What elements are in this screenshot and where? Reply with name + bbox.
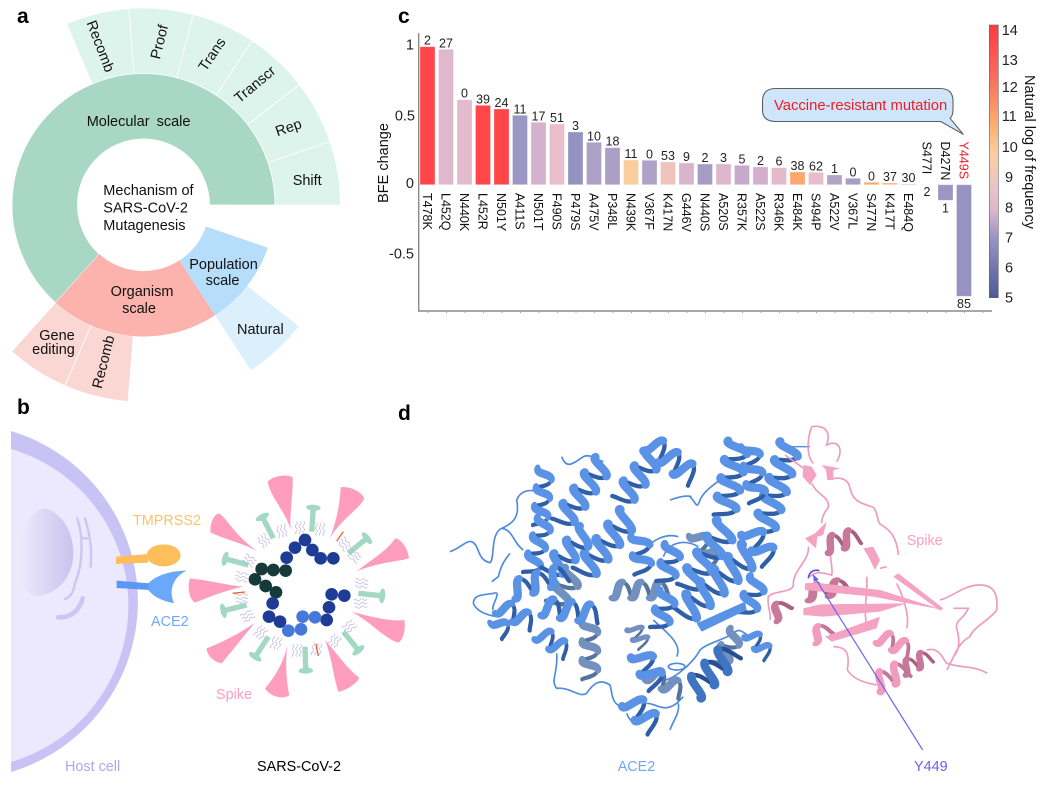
ACE2 rear grey helices xyxy=(546,529,744,699)
bar count labels: 9 xyxy=(683,150,690,164)
colour bar tick labels: 7 xyxy=(1005,230,1013,246)
bar count labels: 2 xyxy=(424,34,431,48)
mutation labels: N501Y xyxy=(494,193,508,232)
schematic labels: Host cell xyxy=(65,759,120,775)
panel d: protein structure xyxy=(398,402,997,775)
bar count labels: 53 xyxy=(661,149,675,163)
Y449 residue marker and arrow xyxy=(808,570,923,750)
bar count labels: 30 xyxy=(902,171,915,185)
sunburst labels: editing xyxy=(32,342,75,358)
colour bar tick labels: 14 xyxy=(1002,23,1018,39)
bar count labels: 62 xyxy=(809,159,823,173)
TMPRSS2 receptor xyxy=(116,544,181,566)
y axis tick labels: -0.5 xyxy=(389,246,414,262)
mutation labels: G446V xyxy=(679,193,693,233)
bars xyxy=(420,47,972,296)
panel label c: c xyxy=(398,5,410,28)
bar count labels: 5 xyxy=(739,152,746,166)
mutation labels: N440S xyxy=(698,193,712,231)
mutation labels: L452R xyxy=(476,193,490,230)
schematic labels: SARS-CoV-2 xyxy=(257,759,341,775)
colour bar tick labels: 12 xyxy=(1002,80,1018,96)
mutation labels: E484Q xyxy=(901,193,915,232)
bar count labels: 2 xyxy=(702,151,709,165)
structure labels xyxy=(618,533,948,775)
bar count labels: 3 xyxy=(572,119,579,133)
colour bar tick labels: 9 xyxy=(1005,170,1013,186)
mutation labels: L452Q xyxy=(439,193,453,231)
bar count labels: 0 xyxy=(461,87,468,101)
bar count labels: 6 xyxy=(776,155,783,169)
axes xyxy=(419,33,992,311)
outer ring: organism mechanisms xyxy=(12,303,133,401)
sunburst labels: Organism xyxy=(111,284,173,300)
spike loops xyxy=(768,426,997,685)
colour bar tick labels: 10 xyxy=(1002,140,1018,156)
mutation labels: N501T xyxy=(531,193,545,231)
receptor icons and spike schematic xyxy=(116,476,409,697)
ACE2 receptor xyxy=(117,571,187,603)
sunburst labels: Molecular scale xyxy=(87,114,190,130)
mutation labels: A411S xyxy=(513,193,527,230)
mutation labels: S494P xyxy=(809,193,823,231)
spike beta strands xyxy=(803,465,943,642)
ACE2 loops xyxy=(450,447,810,730)
sunburst labels: scale xyxy=(122,301,156,317)
panel b: host cell and virus schematic xyxy=(11,396,409,775)
sunburst labels: Mechanism of xyxy=(103,183,195,199)
RNA beads xyxy=(249,534,351,637)
mutation labels: T478K xyxy=(420,193,434,230)
bar count labels: 18 xyxy=(606,135,619,149)
bar count labels: 0 xyxy=(646,147,653,161)
segment: organism scale xyxy=(56,254,215,336)
bar count labels: 51 xyxy=(550,111,564,125)
callout: vaccine-resistant mutation: Vaccine-resistant mutation xyxy=(774,98,947,114)
structure labels: ACE2 xyxy=(618,759,655,775)
sunburst labels: Recomb xyxy=(90,334,118,390)
sunburst labels: Recomb xyxy=(83,18,117,75)
y axis tick labels: 0.5 xyxy=(395,109,415,125)
ACE2 dark coil xyxy=(685,643,741,698)
panel label b: b xyxy=(17,396,30,419)
y axis title: BFE change xyxy=(376,123,392,203)
sunburst labels: Transcr xyxy=(232,63,279,107)
mutation labels: V367F xyxy=(642,193,656,230)
sunburst labels: Mutagenesis xyxy=(103,218,186,234)
mutation labels: S477I xyxy=(920,142,934,174)
mutation labels: N439K xyxy=(624,193,638,232)
colour bar tick labels: 11 xyxy=(1002,109,1017,125)
colour bar legend xyxy=(989,23,1037,306)
mutation labels: K417T xyxy=(883,193,897,230)
bar count labels: 27 xyxy=(439,36,453,50)
mutation labels: S477N xyxy=(864,193,878,231)
bar count labels: 2 xyxy=(757,154,764,168)
colour bar title: Natural log of frequency xyxy=(1021,75,1037,230)
panel label d: d xyxy=(398,402,411,425)
Spike ribbon structure xyxy=(768,426,997,750)
bar count labels: 1 xyxy=(942,201,949,215)
panel a: sunburst diagram xyxy=(12,5,340,401)
bar count labels: 0 xyxy=(868,169,875,183)
segment: population scale xyxy=(180,226,268,315)
orange markers xyxy=(233,532,343,656)
bar count labels xyxy=(424,34,971,311)
ACE2 ribbon structure xyxy=(450,435,810,735)
host cell xyxy=(11,431,138,772)
mutation labels: A522S xyxy=(753,193,767,231)
mutation labels: V367L xyxy=(846,193,860,229)
structure labels: Y449 xyxy=(914,759,948,775)
y axis tick labels: 0 xyxy=(406,176,414,192)
bar count labels: 10 xyxy=(587,129,601,143)
membrane proteins xyxy=(219,504,386,674)
mutation labels: A520S xyxy=(716,193,730,231)
ACE2 straight ribbon xyxy=(697,602,747,632)
mutation labels: P479S xyxy=(568,193,582,231)
colour bar tick labels: 6 xyxy=(1005,260,1013,276)
schematic labels: Spike xyxy=(216,687,252,703)
ACE2 front helices xyxy=(490,435,800,735)
bar count labels: 24 xyxy=(495,96,508,110)
mutation labels: K417N xyxy=(661,193,675,231)
bar count labels: 1 xyxy=(831,162,838,176)
mutation labels: E484K xyxy=(790,193,804,231)
schematic labels xyxy=(65,513,341,775)
mutation labels: P348L xyxy=(605,193,619,229)
schematic labels: ACE2 xyxy=(151,614,189,630)
mutation labels xyxy=(420,142,971,233)
sunburst labels: Shift xyxy=(293,173,322,189)
mutation labels: N440K xyxy=(457,193,471,232)
colour bar tick labels: 5 xyxy=(1005,290,1013,306)
sunburst labels: scale xyxy=(206,273,239,289)
sunburst labels: Proof xyxy=(148,22,172,61)
sunburst labels: Rep xyxy=(274,116,304,140)
bar count labels: 39 xyxy=(476,92,490,106)
bar count labels: 11 xyxy=(514,102,527,116)
mutation labels: R346K xyxy=(772,193,786,232)
segment: molecular scale xyxy=(12,73,275,303)
bar count labels: 85 xyxy=(957,297,971,311)
virus spikes xyxy=(189,476,409,697)
sunburst labels: Natural xyxy=(237,322,284,338)
colour bar tick labels: 8 xyxy=(1005,200,1013,216)
bar count labels: 0 xyxy=(850,165,857,179)
sunburst labels: SARS-CoV-2 xyxy=(103,200,188,216)
mutation labels: D427N xyxy=(938,142,952,180)
callout: vaccine-resistant mutation xyxy=(762,88,963,134)
mutation labels: R357K xyxy=(735,193,749,232)
bar count labels: 3 xyxy=(720,151,727,165)
nucleus and organelles xyxy=(20,508,91,617)
outer ring: molecular mechanisms xyxy=(66,8,340,205)
y axis tick labels: 1 xyxy=(406,38,414,54)
panel c: BFE change bar chart xyxy=(376,5,1037,312)
panel label a: a xyxy=(17,5,29,28)
outer ring: natural xyxy=(215,286,299,370)
colour bar tick labels xyxy=(1002,23,1018,306)
bar count labels: 38 xyxy=(791,159,804,173)
lipid squiggles xyxy=(235,521,368,657)
bar count labels: 37 xyxy=(883,170,897,184)
bar count labels: 17 xyxy=(532,109,545,123)
sunburst labels: Gene xyxy=(39,328,75,344)
bar count labels: 11 xyxy=(625,147,638,161)
y axis tick labels xyxy=(389,38,415,262)
sunburst labels xyxy=(32,18,322,390)
spike helices xyxy=(768,528,933,675)
mutation labels: A475V xyxy=(587,193,601,231)
sunburst labels: Population xyxy=(189,257,258,273)
mutation labels: F490S xyxy=(550,193,564,230)
sunburst labels: Trans xyxy=(196,35,230,74)
colour bar tick labels: 13 xyxy=(1002,53,1018,69)
bar count labels: 2 xyxy=(924,185,931,199)
schematic labels: TMPRSS2 xyxy=(133,513,201,529)
structure labels: Spike xyxy=(907,533,943,549)
mutation labels: Y449S xyxy=(957,142,971,179)
mutation labels: A522V xyxy=(827,193,841,231)
